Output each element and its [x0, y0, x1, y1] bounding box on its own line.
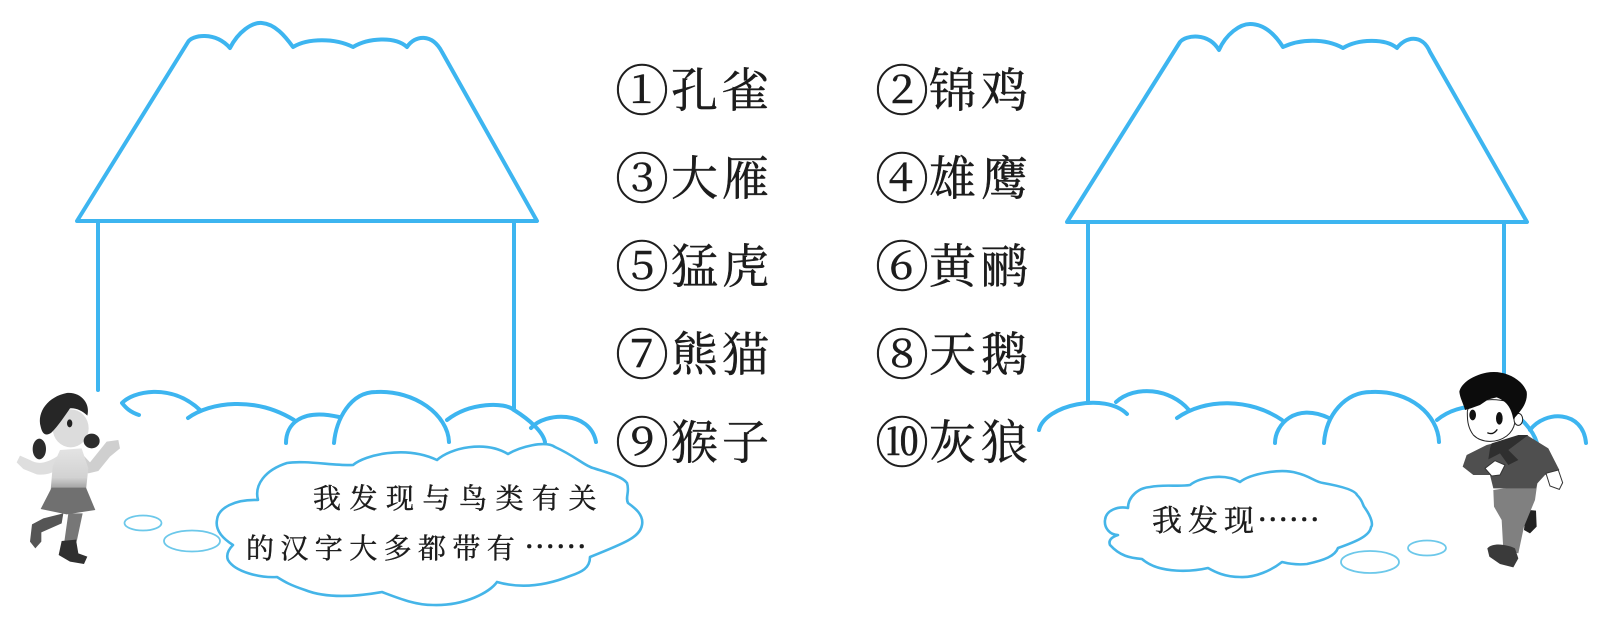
item 9: 子	[722, 418, 769, 470]
bubble text line 2: 的汉字大多都带有	[246, 533, 515, 565]
item 2: 鸡	[981, 66, 1028, 118]
item 1: 孔	[671, 66, 718, 118]
face	[53, 409, 89, 447]
trousers	[1493, 483, 1537, 553]
back shoe	[1524, 510, 1537, 533]
hair	[40, 393, 88, 434]
item 2: ②	[875, 62, 929, 122]
item 7: ⑦	[615, 326, 669, 386]
house: left	[77, 23, 596, 443]
walls: right house	[1088, 222, 1504, 408]
item 5: 虎	[722, 242, 769, 294]
item 9: 猴	[671, 418, 718, 470]
jacket	[1463, 435, 1559, 488]
back leg	[30, 513, 63, 548]
left arm	[17, 456, 60, 475]
left pigtail	[33, 439, 46, 459]
item 5: ⑤	[615, 238, 669, 298]
character: girl	[17, 393, 120, 564]
cloud outline	[1105, 471, 1372, 577]
front leg	[64, 513, 83, 542]
item 10: 狼	[981, 418, 1028, 470]
boot	[59, 540, 87, 564]
speech bubble: girl	[124, 444, 642, 605]
item 8: 鹅	[981, 330, 1028, 382]
item 10: 灰	[929, 418, 976, 470]
item 4: 雄	[929, 154, 976, 206]
item 6: 黄	[929, 242, 978, 294]
bubble text: ……	[1257, 496, 1320, 541]
mouth	[1487, 429, 1497, 434]
item 1: ①	[615, 62, 669, 122]
right eye	[1496, 412, 1503, 425]
item 1: 雀	[722, 66, 769, 118]
item 3: ③	[615, 150, 669, 210]
face	[1467, 400, 1516, 441]
item 7: 熊	[671, 330, 719, 382]
ear	[1514, 413, 1523, 425]
eye	[67, 419, 72, 427]
walls: left house	[98, 222, 514, 410]
cloud outline	[217, 444, 642, 605]
bubble text line 2: ……	[524, 523, 587, 568]
bubble text: 我发现	[1152, 505, 1254, 538]
item 5: 猛	[671, 242, 718, 294]
item 9: ⑨	[615, 414, 669, 474]
scarf	[1488, 435, 1528, 465]
hair	[1459, 372, 1527, 419]
item 7: 猫	[722, 330, 769, 382]
cloud base: left house	[122, 392, 596, 443]
item 4: ④	[875, 150, 929, 210]
bubble text line 1: 我发现与鸟类有关	[313, 483, 597, 515]
roof: right house	[1067, 24, 1527, 222]
front shoe	[1487, 544, 1518, 567]
house: right	[1039, 24, 1586, 443]
item 10: ⑩	[875, 414, 929, 474]
sweater	[51, 448, 88, 490]
right arm	[80, 440, 120, 473]
item 3: 大	[671, 154, 718, 206]
item 2: 锦	[929, 66, 976, 118]
skirt	[41, 488, 95, 514]
roof: left house	[77, 23, 537, 221]
item 6: 鹂	[981, 242, 1028, 294]
item 8: 天	[929, 330, 976, 382]
left eye	[1469, 410, 1476, 420]
front fist	[1485, 461, 1505, 476]
item 4: 鹰	[981, 154, 1028, 206]
item 8: ⑧	[875, 326, 929, 386]
thought bubble medium	[1341, 551, 1399, 573]
back hand	[1546, 470, 1563, 489]
cloud base: right house	[1039, 391, 1586, 443]
thought bubble small	[1408, 540, 1446, 556]
character: boy	[1459, 372, 1563, 567]
thought bubble medium	[164, 530, 220, 552]
animal word list	[615, 62, 1028, 474]
right pigtail	[84, 434, 100, 448]
item 6: ⑥	[875, 238, 929, 298]
thought bubble small	[124, 516, 162, 530]
item 3: 雁	[722, 154, 769, 206]
speech bubble: boy	[1105, 471, 1446, 577]
